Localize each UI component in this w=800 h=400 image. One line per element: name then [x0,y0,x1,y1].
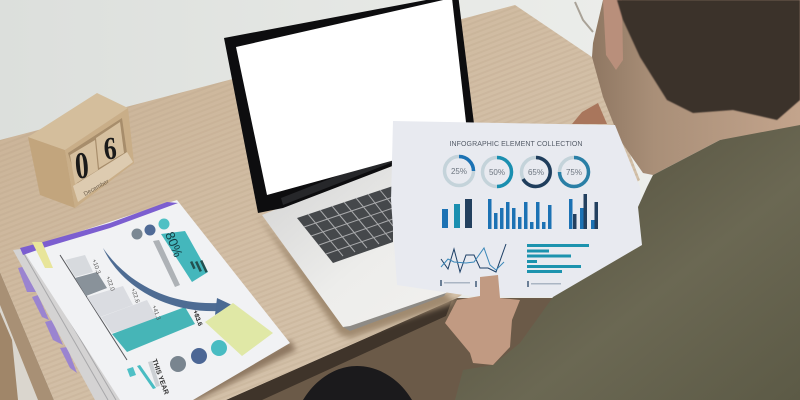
stats card with 80% [132,218,208,287]
donut 50% [482,158,512,186]
calendar left side [28,137,75,208]
descending bar chart: +22.6 [129,288,140,305]
black trousers [303,366,412,400]
laptop screen bezel [224,0,476,213]
glasses arm [575,2,593,32]
ear [603,0,623,70]
laptop base with keyboard [262,160,470,331]
man's hand at top of paper [572,103,607,124]
laptop [224,0,476,338]
laptop hinge strip [281,154,393,205]
donut 75%: 75% [566,168,582,177]
purple top strip [20,202,178,255]
stack of printed reports [13,200,296,400]
laptop shadow on desk [256,213,456,338]
descending bar chart: +83.6 [191,309,203,328]
donut 25%: 25% [451,167,467,176]
man's head and hair [592,0,800,175]
laptop blank white display [236,0,468,195]
descending bar chart: +41.3 [150,305,161,322]
man's olive shirt [455,125,800,400]
hair [617,0,800,120]
donut charts [444,156,588,186]
this year label: THIS YEAR [150,358,169,396]
grouped bar chart [569,194,598,229]
paper heading: INFOGRAPHIC ELEMENT COLLECTION [449,141,583,148]
under sheets [13,248,125,400]
calendar tiles [70,140,98,184]
legend circles [170,340,227,372]
head and neck skin [592,0,800,175]
descending bar chart [60,255,203,360]
floor and desk leg [0,300,40,400]
calendar digits: 0 [73,144,91,188]
held paper infographic [391,121,642,297]
purple index tabs [18,265,77,373]
three-bar chart [442,199,472,228]
stack shadow [180,340,296,400]
calendar month label: December [83,179,110,198]
sticky note [205,303,273,356]
stats card with 80%: 80% [162,230,186,260]
curved arrow [103,248,232,315]
donut 65% [522,158,550,186]
this year label [127,358,169,396]
horizontal bar chart [527,244,589,273]
donut 75% [560,158,588,186]
desk with wood top [0,5,640,400]
desk calendar block showing 06 [28,93,134,208]
descending bar chart: +10.3 [90,259,101,276]
descending bar chart: +22.0 [104,276,115,293]
yellow tab note [32,242,53,268]
donut 65%: 65% [528,168,544,177]
top sheet [23,200,290,400]
calendar front frame [65,108,134,208]
space under desk [226,298,600,400]
line chart [441,244,506,272]
donut 25% [444,156,474,186]
chart legends [440,280,561,287]
donut 50%: 50% [489,168,505,177]
desk calendar block showing 06: 6 [102,131,118,167]
calendar top face [28,93,128,150]
eleven-bar chart [488,199,552,229]
keyboard [297,186,393,263]
man's hand holding paper [445,275,520,365]
